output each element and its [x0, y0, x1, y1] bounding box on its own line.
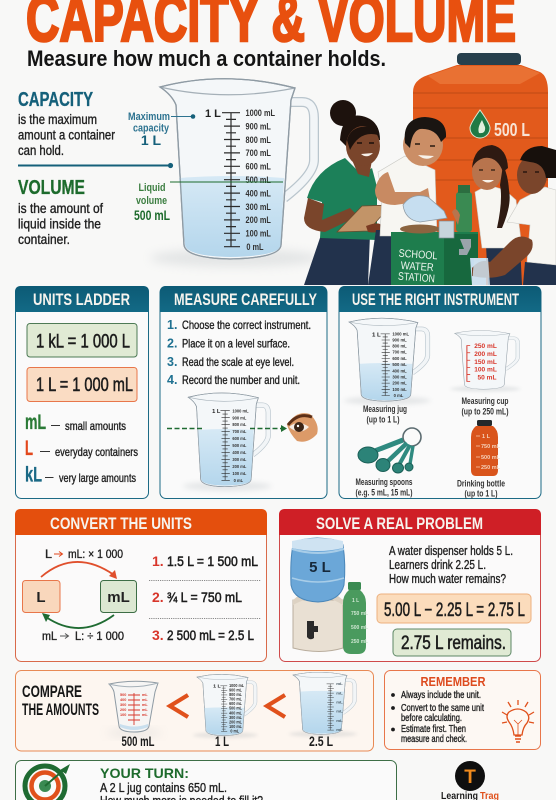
measuring jug: 500 mL — [392, 362, 407, 367]
panel: your turn — [16, 760, 396, 800]
problem statement — [389, 543, 513, 586]
problem statement: Learners drink 2.25 L. — [389, 557, 486, 572]
steps list: 3. — [167, 355, 177, 369]
text block: volume definition: VOLUME — [18, 177, 85, 199]
conversion cycle diagram — [22, 547, 136, 643]
large measuring jug: 600 mL — [246, 162, 271, 172]
bullet list: before calculating. — [401, 713, 462, 724]
icon: green bottle: 750 mL — [351, 611, 368, 617]
measuring jug: 400 mL — [392, 368, 407, 373]
heading: convert the units: CONVERT THE UNITS — [50, 514, 192, 533]
measuring cup: 250 mL — [474, 343, 497, 350]
1 L jug: 500 mL — [229, 706, 243, 711]
panel: convert the units — [15, 509, 267, 662]
steps list — [167, 318, 311, 387]
your turn text — [100, 765, 263, 800]
illustration: water station box — [391, 221, 486, 285]
panel: use the right instrument — [339, 286, 541, 500]
jug with eye-level line: 200 mL — [232, 464, 247, 469]
measuring cup: 150 mL — [474, 359, 497, 366]
large measuring jug: 0 mL — [246, 242, 264, 252]
jug with eye-level line: 500 mL — [232, 443, 247, 448]
callout: maximum capacity: capacity — [133, 122, 170, 134]
icon: target with arrow — [25, 764, 70, 800]
logo: Learning Trag — [441, 761, 499, 800]
label: measuring spoons — [356, 477, 412, 498]
measuring jug: 1 L — [372, 332, 381, 338]
kilolitre equation box — [27, 324, 137, 357]
labels: amounts: 500 mL — [122, 734, 154, 749]
1 L jug: 400 mL — [229, 710, 243, 715]
large measuring jug: 500 mL — [246, 175, 271, 185]
jug with eye-level line: 600 mL — [232, 436, 247, 441]
measuring jug: 0 mL — [394, 393, 404, 398]
conversion cycle diagram: mL — [107, 589, 130, 606]
illustration: girl with clipboard — [304, 100, 391, 285]
steps list: Choose the correct instrument. — [182, 318, 311, 332]
litre equation box: 1 L = 1 000 mL — [36, 375, 133, 396]
conversion cycle diagram: L — [36, 589, 46, 606]
callout: liquid volume: volume — [136, 195, 167, 207]
worked conversions list — [149, 553, 261, 643]
unit list: very large amounts — [59, 471, 136, 485]
label: measuring jug: Measuring jug — [363, 404, 407, 415]
worked conversions list: 3. — [152, 627, 164, 643]
2.5 L jug: mL — [336, 728, 343, 732]
icon: green bottle: 250 mL — [351, 639, 368, 645]
problem statement: A water dispenser holds 5 L. — [389, 543, 513, 558]
litre equation box — [27, 368, 137, 402]
measuring cup — [450, 331, 520, 392]
jug with eye-level line: 700 mL — [232, 429, 247, 434]
large measuring jug: 700 mL — [246, 148, 271, 158]
icon: orange drinking bottle: 750 mL — [481, 444, 501, 450]
bullet list: Always include the unit. — [401, 690, 481, 701]
2.5 L jug: mL — [336, 700, 343, 704]
icon: light bulb — [502, 700, 534, 742]
jug with eye-level line: 1000 mL — [232, 408, 249, 413]
1 L jug: 900 mL — [229, 687, 243, 693]
panel: remember — [384, 670, 540, 750]
text block: capacity definition: can hold. — [18, 143, 64, 158]
conversion cycle diagram: mL — [42, 629, 57, 643]
your turn text: YOUR TURN: — [100, 765, 189, 781]
icon: measuring spoons — [358, 428, 421, 473]
answer box: 2.75 L remains. — [401, 633, 506, 654]
500 mL cup: 500 — [120, 693, 126, 697]
measuring jug: 700 mL — [392, 350, 407, 355]
label: measuring jug — [363, 404, 407, 426]
500 mL cup: 100 — [120, 713, 126, 717]
steps list: Place it on a level surface. — [182, 336, 290, 350]
worked conversions list: 2 500 mL = 2.5 L — [167, 627, 254, 643]
icon: green bottle: 500 mL — [351, 625, 368, 631]
panel: units ladder — [15, 286, 149, 498]
large measuring jug: 900 mL — [246, 122, 271, 132]
1 L jug: 0 mL — [230, 728, 240, 734]
1 L jug — [193, 674, 258, 738]
jug with eye-level line — [183, 393, 271, 491]
icon: orange drinking bottle: 1 L — [482, 434, 491, 440]
jug with eye-level line: 300 mL — [232, 457, 247, 462]
icon: water dispenser: 5 L — [309, 559, 331, 576]
callout: maximum capacity — [128, 111, 195, 148]
2.5 L jug: mL — [336, 681, 343, 686]
500 mL cup — [106, 681, 162, 736]
text block: volume definition: container. — [18, 232, 70, 247]
steps list: 1. — [167, 318, 177, 332]
unit list: small amounts — [65, 419, 126, 433]
unit list: kL — [25, 464, 42, 486]
large measuring jug: 200 mL — [246, 215, 271, 225]
text block: volume definition — [18, 177, 103, 247]
equation box — [377, 594, 531, 623]
1 L jug: 800 mL — [229, 692, 243, 697]
2.5 L jug: mL — [336, 709, 343, 714]
500 mL cup: 200 — [120, 708, 126, 712]
illustration: boy pouring water — [368, 117, 447, 285]
2.5 L jug — [289, 672, 357, 737]
measuring jug: 100 mL — [392, 387, 407, 392]
steps list: 4. — [167, 373, 177, 387]
worked conversions list: 1.5 L = 1 500 mL — [167, 553, 258, 569]
measuring cup: 100 mL — [474, 367, 497, 374]
panel: solve a real problem — [279, 509, 541, 662]
worked conversions list: 1. — [152, 553, 164, 569]
unit list: mL — [25, 411, 46, 434]
measuring jug: 800 mL — [392, 344, 407, 349]
large measuring jug: 300 mL — [246, 202, 271, 212]
divider line with dot — [18, 163, 173, 168]
steps list: Read the scale at eye level. — [182, 355, 294, 369]
500 mL cup: mL — [142, 708, 148, 712]
conversion cycle diagram: L: ÷ 1 000 — [75, 629, 124, 643]
illustration: water station box: WATER — [400, 260, 434, 274]
label: drinking bottle: (up to 1 L) — [464, 488, 498, 500]
icon: green bottle: 1 L — [352, 598, 359, 604]
500 mL cup: 300 — [120, 703, 126, 707]
unit list: L — [25, 437, 33, 460]
measuring jug: 300 mL — [392, 374, 407, 380]
jug with eye-level line: 0 mL — [234, 478, 243, 483]
text block: capacity definition — [18, 89, 115, 158]
large measuring jug: 800 mL — [246, 135, 271, 145]
jug with eye-level line: 400 mL — [232, 450, 247, 455]
conversion cycle diagram: L — [45, 547, 52, 561]
1 L jug: 1000 mL — [229, 683, 245, 688]
label: measuring spoons: Measuring spoons — [356, 477, 412, 488]
heading: remember: REMEMBER — [420, 674, 486, 689]
illustration: girl with bottle — [452, 145, 522, 285]
bullet list — [391, 690, 484, 745]
unit list — [25, 411, 138, 486]
callout: maximum capacity: 1 L — [141, 132, 162, 148]
1 L jug: 200 mL — [229, 719, 243, 724]
measuring jug: 600 mL — [392, 356, 407, 361]
callout: maximum capacity: Maximum — [128, 111, 170, 123]
logo: Learning Trag: T — [464, 767, 476, 788]
arrow: eye-level dashed line — [167, 425, 287, 432]
heading: units ladder: UNITS LADDER — [33, 290, 130, 309]
text block: volume definition: liquid inside the — [18, 216, 101, 232]
jug with eye-level line: 900 mL — [232, 415, 247, 420]
illustration: boy with tap — [472, 146, 556, 285]
label: measuring cup: Measuring cup — [462, 396, 509, 407]
illustration: water station box: SCHOOL — [398, 248, 438, 262]
500 mL cup: mL — [142, 693, 148, 697]
label: drinking bottle — [457, 478, 505, 500]
label: measuring cup: (up to 250 mL) — [462, 406, 508, 418]
callout: liquid volume: Liquid — [138, 182, 166, 194]
icon: eye — [287, 413, 318, 442]
subtitle: Measure how much a container holds. — [27, 46, 386, 71]
heading: compare the amounts: THE AMOUNTS — [22, 700, 99, 719]
large measuring jug — [150, 79, 320, 267]
worked conversions list: ¾ L = 750 mL — [167, 589, 242, 605]
callout: liquid volume: 500 mL — [134, 207, 170, 223]
text block: volume definition: is the amount of — [18, 201, 103, 216]
icon: orange drinking bottle: 250 mL — [481, 465, 501, 471]
label: measuring spoons: (e.g. 5 mL, 15 mL) — [356, 488, 412, 498]
measuring jug: 900 mL — [392, 337, 407, 343]
less-than sign — [267, 695, 285, 717]
labels: amounts: 1 L — [215, 734, 229, 749]
jug with eye-level line: 100 mL — [232, 471, 247, 476]
labels: amounts — [122, 734, 333, 749]
text block: capacity definition: is the maximum — [18, 112, 97, 127]
panel: measure carefully — [160, 286, 327, 498]
labels: amounts: 2.5 L — [309, 734, 333, 749]
kilolitre equation box: 1 kL = 1 000 L — [36, 332, 130, 352]
500 mL cup: mL — [142, 703, 148, 707]
500 mL cup: mL — [142, 713, 148, 717]
large measuring jug: 1000 mL — [246, 108, 275, 118]
your turn text: A 2 L jug contains 650 mL. — [100, 780, 227, 795]
measuring cup: 50 mL — [478, 374, 496, 381]
icon: orange drinking bottle — [471, 420, 501, 476]
conversion cycle diagram: mL: × 1 000 — [68, 547, 123, 561]
icon: water dispenser — [291, 538, 345, 652]
unit list: everyday containers — [55, 445, 138, 459]
panel: compare the amounts — [16, 670, 374, 751]
bullet list: measure and check. — [401, 734, 467, 745]
icon: orange drinking bottle: 500 mL — [481, 455, 501, 461]
jug with eye-level line: 1 L — [212, 409, 221, 415]
1 L jug: 100 mL — [229, 724, 243, 729]
bullet list: Convert to the same unit — [401, 703, 484, 714]
illustration: water station box: STATION — [398, 271, 435, 285]
bullet list: Estimate first. Then — [401, 724, 466, 735]
2.5 L jug: mL — [336, 718, 343, 723]
1 L jug: 300 mL — [229, 715, 243, 720]
measuring jug: 200 mL — [392, 380, 407, 386]
large measuring jug: 400 mL — [246, 189, 271, 199]
callout: liquid volume — [134, 182, 283, 223]
label: measuring jug: (up to 1 L) — [366, 414, 400, 426]
text block: capacity definition: amount a container — [18, 128, 115, 142]
label: measuring cup — [462, 396, 509, 418]
large measuring jug: 100 mL — [246, 229, 271, 239]
1 L jug: 600 mL — [229, 701, 243, 706]
label: drinking bottle: Drinking bottle — [457, 478, 505, 490]
1 L jug: 700 mL — [229, 696, 243, 702]
illustration: water tank — [413, 53, 548, 285]
large measuring jug: 1 L — [205, 108, 221, 120]
heading: solve a real problem: SOLVE A REAL PROBLEM — [316, 514, 483, 533]
heading: measure carefully: MEASURE CAREFULLY — [174, 290, 317, 309]
measuring jug: 1000 mL — [392, 331, 409, 336]
1 L jug: 1 L — [213, 684, 221, 690]
500 mL cup: mL — [142, 698, 148, 702]
less-than sign — [170, 695, 188, 717]
heading: compare the amounts: COMPARE — [22, 682, 82, 701]
measuring cup: 200 mL — [474, 351, 497, 358]
heading: compare the amounts — [22, 682, 99, 719]
measuring jug — [344, 318, 431, 405]
text block: capacity definition: CAPACITY — [18, 89, 93, 111]
steps list: Record the number and unit. — [182, 373, 300, 387]
illustration: water tank: 500 L — [494, 120, 530, 140]
answer box — [393, 629, 511, 656]
jug with eye-level line: 800 mL — [232, 422, 247, 427]
2.5 L jug: mL — [336, 691, 343, 695]
problem statement: How much water remains? — [389, 571, 506, 586]
icon: green bottle — [343, 582, 368, 654]
500 mL cup: 400 — [120, 698, 126, 702]
worked conversions list: 2. — [152, 589, 164, 605]
steps list: 2. — [167, 336, 177, 350]
